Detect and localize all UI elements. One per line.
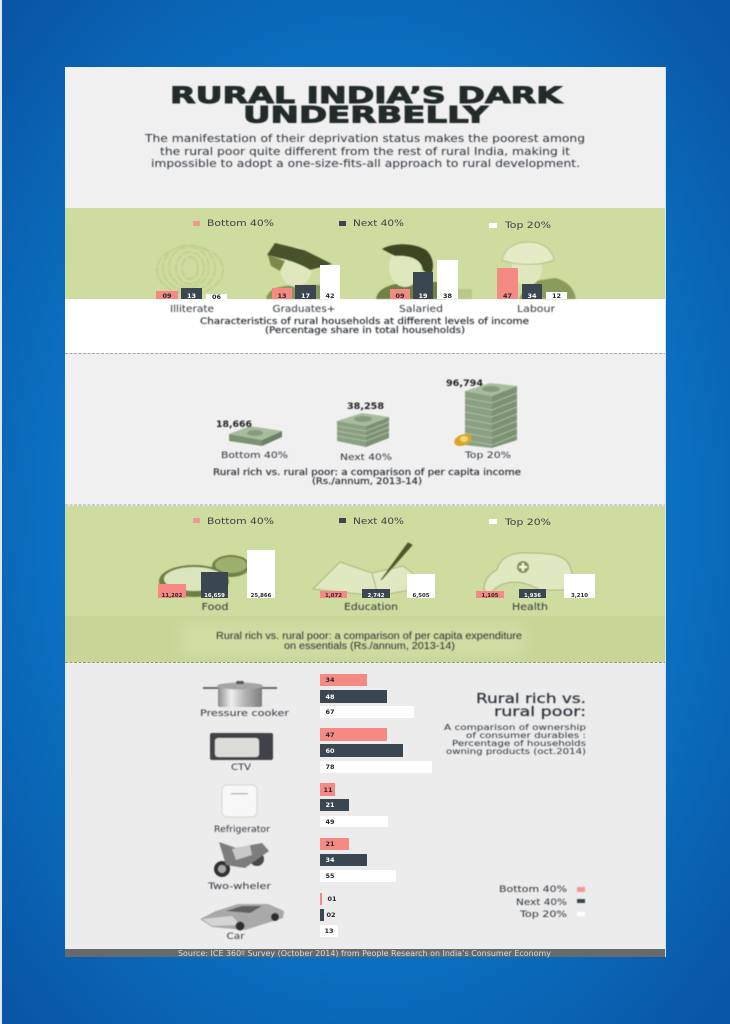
icon: salaried man bbox=[376, 244, 472, 299]
category labels: Salaried bbox=[399, 304, 443, 315]
bar chart: household shares bbox=[156, 260, 567, 301]
icon: money stack large with coin bbox=[453, 383, 517, 448]
bar chart: household shares: 47 bbox=[503, 292, 512, 300]
category labels: Food bbox=[202, 602, 228, 613]
bar chart: expenditure: 16,659 bbox=[204, 593, 225, 599]
label: Pressure cooker bbox=[200, 709, 289, 719]
bar chart: household shares: 42 bbox=[325, 292, 335, 300]
panel: consumer durables bbox=[65, 664, 665, 949]
icon: fingerprint bbox=[157, 245, 223, 294]
text: ownership description: owning products (oct.2014) bbox=[446, 747, 586, 756]
category labels: Health bbox=[512, 602, 548, 613]
category labels: Labour bbox=[517, 304, 555, 315]
source bar: Source: ICE 360º Survey (October 2014) from People Research on India’s Consumer Economy bbox=[178, 949, 552, 958]
heading: ownership comparison bbox=[476, 692, 586, 720]
category labels: Education bbox=[344, 602, 398, 613]
label: CTV bbox=[231, 763, 252, 773]
caption: Rural rich vs. rural poor: a comparison of per capita income bbox=[213, 468, 521, 478]
text: ownership description: Percentage of households bbox=[452, 739, 586, 748]
legend: Bottom 40% bbox=[499, 885, 568, 895]
icon: food bowls bbox=[159, 555, 250, 597]
panel: per capita expenditure bbox=[65, 506, 665, 662]
source bar bbox=[65, 949, 665, 958]
bar chart: expenditure: 2,742 bbox=[367, 593, 385, 599]
bar chart: ownership: 13 bbox=[324, 927, 334, 935]
caption bbox=[200, 317, 529, 336]
legend: Next 40% bbox=[353, 517, 405, 527]
category labels bbox=[170, 304, 555, 315]
income group labels bbox=[221, 451, 512, 463]
label: Two-wheler bbox=[207, 882, 271, 892]
income values: 18,666 bbox=[216, 420, 252, 430]
category labels: Graduates+ bbox=[272, 304, 336, 315]
bar chart: ownership: 55 bbox=[325, 872, 335, 880]
icon: book and pen bbox=[313, 543, 430, 596]
label: Car bbox=[226, 932, 245, 942]
bar chart: household shares: 09 bbox=[395, 292, 405, 300]
caption bbox=[216, 631, 522, 652]
icon: refrigerator bbox=[222, 785, 257, 817]
legend: Next 40% bbox=[353, 219, 405, 229]
bar chart: ownership: 34 bbox=[325, 856, 335, 864]
legend: Bottom 40% bbox=[207, 517, 275, 527]
bar chart: expenditure: 11,202 bbox=[162, 593, 183, 599]
legend: Next 40% bbox=[516, 898, 568, 908]
text: ownership description: A comparison of ownership bbox=[444, 723, 586, 732]
caption: (Rs./annum, 2013-14) bbox=[312, 477, 422, 487]
bar chart: household shares: 19 bbox=[418, 292, 428, 300]
intro text: the rural poor quite different from the rest of rural India, making it bbox=[160, 145, 571, 158]
bar chart: household shares: 17 bbox=[301, 292, 310, 300]
income values bbox=[216, 379, 483, 430]
bar chart: ownership: 67 bbox=[325, 708, 335, 716]
panel: infographic sheet bbox=[65, 67, 666, 958]
bar chart: ownership: 21 bbox=[325, 840, 335, 848]
bar chart: household shares: 38 bbox=[443, 292, 452, 300]
icon: car bbox=[200, 904, 284, 930]
bar chart: expenditure bbox=[158, 550, 595, 599]
intro text bbox=[144, 132, 585, 170]
intro text: impossible to adopt a one-size-fits-all approach to rural development. bbox=[151, 157, 580, 170]
icon: nurse cap bbox=[484, 553, 578, 594]
heading: ownership comparison: Rural rich vs. bbox=[476, 692, 586, 707]
legend: Top 20% bbox=[504, 221, 552, 231]
income group labels: Next 40% bbox=[340, 453, 393, 463]
panel: per capita income bbox=[213, 379, 521, 487]
bar chart: expenditure: 6,505 bbox=[412, 593, 430, 599]
income values: 38,258 bbox=[347, 402, 384, 412]
caption: Characteristics of rural households at different levels of income bbox=[200, 317, 529, 327]
income values: 96,794 bbox=[446, 379, 483, 389]
bar chart: ownership: 47 bbox=[325, 731, 335, 739]
icon: money stack small bbox=[229, 426, 282, 446]
legend bbox=[499, 885, 585, 920]
income group labels: Bottom 40% bbox=[221, 451, 289, 461]
bar chart: ownership bbox=[320, 674, 432, 937]
icon: labourer bbox=[502, 242, 576, 299]
icon: television bbox=[210, 733, 273, 760]
caption: on essentials (Rs./annum, 2013-14) bbox=[284, 641, 455, 652]
bar chart: expenditure: 1,936 bbox=[524, 593, 541, 599]
bar chart: ownership: 01 bbox=[327, 895, 337, 903]
bar chart: expenditure: 1,105 bbox=[481, 593, 499, 599]
legend: Top 20% bbox=[519, 910, 568, 920]
bar chart: expenditure: 25,866 bbox=[251, 593, 272, 599]
bar chart: ownership: 21 bbox=[325, 801, 335, 809]
bar chart: expenditure: 1,072 bbox=[325, 593, 342, 599]
bar chart: household shares: 13 bbox=[277, 292, 287, 300]
bar chart: household shares: 09 bbox=[162, 292, 172, 300]
bar chart: expenditure: 3,210 bbox=[571, 593, 588, 599]
icon: graduate bbox=[266, 243, 332, 299]
bar chart: household shares: 06 bbox=[212, 293, 221, 301]
bar chart: ownership: 34 bbox=[325, 676, 335, 684]
legend: Bottom 40% bbox=[207, 219, 275, 229]
caption: Rural rich vs. rural poor: a comparison of per capita expenditure bbox=[216, 631, 522, 642]
income group labels: Top 20% bbox=[464, 451, 512, 461]
text: ownership description: of consumer durables : bbox=[466, 731, 586, 740]
caption bbox=[213, 468, 521, 487]
heading: ownership comparison: rural poor: bbox=[494, 705, 586, 720]
bar chart: household shares: 12 bbox=[552, 292, 561, 300]
panel: household characteristics bbox=[65, 208, 665, 353]
bar chart: ownership: 60 bbox=[325, 747, 335, 755]
bar chart: household shares: 34 bbox=[527, 292, 537, 300]
bar chart: ownership: 49 bbox=[325, 818, 335, 826]
icon: pressure cooker bbox=[203, 681, 277, 707]
bar chart: ownership: 48 bbox=[325, 693, 335, 701]
bar chart: ownership: 02 bbox=[326, 911, 336, 919]
icon: money stack medium bbox=[337, 413, 389, 447]
caption: (Percentage share in total households) bbox=[265, 326, 465, 336]
bar chart: household shares: 13 bbox=[187, 292, 196, 300]
title bbox=[170, 84, 563, 128]
text: ownership description bbox=[444, 723, 586, 756]
legend: Top 20% bbox=[504, 518, 552, 528]
icon: motorbike bbox=[214, 842, 269, 877]
title: UNDERBELLY bbox=[243, 104, 490, 128]
category labels bbox=[202, 602, 548, 613]
intro text: The manifestation of their deprivation status makes the poorest among bbox=[144, 132, 585, 145]
category labels: Illiterate bbox=[170, 304, 214, 315]
legend bbox=[193, 219, 552, 231]
label: Refrigerator bbox=[214, 825, 270, 835]
legend bbox=[193, 517, 552, 528]
bar chart: ownership: 11 bbox=[323, 786, 333, 794]
title: RURAL INDIA’S DARK bbox=[170, 84, 563, 109]
bar chart: ownership: 78 bbox=[325, 763, 335, 771]
